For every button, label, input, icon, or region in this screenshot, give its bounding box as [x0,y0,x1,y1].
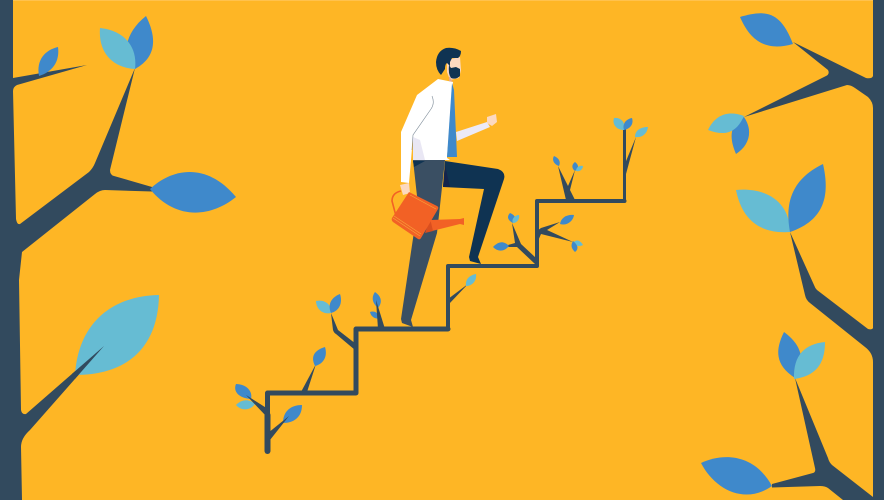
near leg [401,160,445,327]
hand holding can [400,183,410,195]
right tree [701,0,884,500]
sprout: second step [370,292,385,329]
right tree leaves [701,13,826,495]
shirt [401,79,453,183]
sprout: bottom [235,384,302,440]
watering can [392,191,464,239]
head [436,48,461,82]
sprout: first step [301,347,326,392]
staircase [268,130,624,451]
far leg [443,161,504,264]
sprouts on staircase [235,118,648,440]
sprout: top step [553,156,583,200]
sprout: fourth riser right [537,215,583,252]
sprout: second riser [316,294,356,350]
sprout: third riser [448,274,476,304]
far arm and hand [456,114,497,141]
sprout: staircase top [613,118,648,174]
sprout: fourth riser left [493,213,536,264]
left tree leaves [38,16,236,379]
man [392,48,504,327]
tie [447,83,457,157]
left tree [0,0,236,500]
